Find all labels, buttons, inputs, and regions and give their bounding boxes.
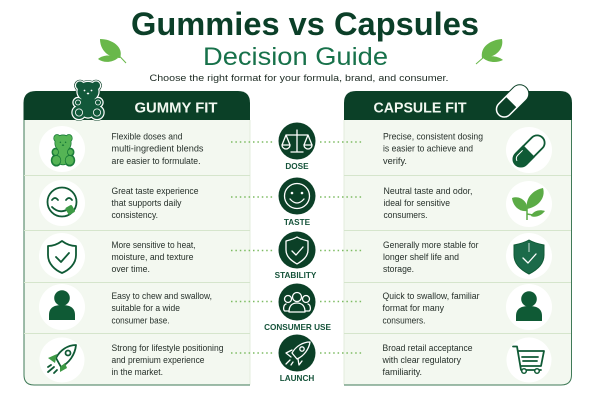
text: capsule row 3: storage. (383, 264, 414, 274)
panel border (344, 110, 572, 385)
panel body (24, 110, 250, 385)
text: capsule row 3 (383, 240, 478, 274)
title: Gummies vs Capsules (131, 6, 479, 42)
text: gummy row 1: Flexible doses and (112, 132, 182, 142)
panel inner edge (249, 120, 251, 384)
icon: shopping cart (506, 338, 552, 382)
tagline: Choose the right format for your formula, brand, and consumer. (150, 73, 449, 84)
panel: gummy fit (24, 82, 250, 385)
text: capsule row 2: Neutral taste and odor, (384, 186, 472, 196)
connector dots (231, 142, 364, 353)
criterion: consumer use: CONSUMER USE (264, 323, 331, 332)
text: capsule row 1: verify. (383, 156, 407, 166)
subtitle: Decision Guide (203, 43, 388, 71)
text: gummy row 4: consumer base. (112, 316, 170, 326)
panel body (344, 110, 572, 385)
icon: header bear (72, 82, 104, 119)
text: capsule row 1: is easier to achieve and (383, 144, 473, 154)
icon: person (39, 284, 85, 330)
text: gummy row 1 (112, 132, 204, 166)
text: capsule row 5 (382, 343, 472, 377)
text: capsule row 2: consumers. (384, 210, 428, 220)
text: capsule row 5: with clear regulatory (382, 355, 461, 365)
panel: capsule fit (344, 81, 572, 385)
text: gummy row 1: multi-ingredient blends (112, 144, 204, 154)
text: capsule row 4: Quick to swallow, familiar (382, 291, 480, 301)
criterion: stability (275, 232, 317, 280)
text: capsule row 5: Broad retail acceptance (382, 343, 472, 353)
text: gummy row 3: moisture, and texture (112, 252, 194, 262)
text: capsule row 5: familiarity. (382, 367, 422, 377)
criterion: dose: DOSE (285, 162, 309, 171)
row dividers (344, 176, 571, 334)
icon: right leaves (476, 39, 503, 64)
text: gummy row 2: consistency. (112, 210, 158, 220)
text: gummy row 5: in the market. (112, 367, 163, 377)
text: gummy row 1: are easier to formulate. (112, 156, 200, 166)
criterion: launch: LAUNCH (280, 374, 314, 383)
text: capsule row 4 (382, 291, 480, 326)
header label: CAPSULE FIT (374, 100, 467, 116)
header label: GUMMY FIT (134, 100, 218, 116)
criterion: consumer use (264, 284, 331, 332)
text: capsule row 2 (384, 186, 472, 220)
header bar (344, 91, 572, 120)
icon: header capsule (491, 81, 533, 122)
text: gummy row 3: More sensitive to heat, (112, 240, 196, 250)
icon: person (506, 284, 552, 330)
criterion: stability: STABILITY (275, 271, 317, 280)
panel inner edge (343, 120, 345, 384)
panel border (24, 110, 250, 385)
text: capsule row 3: longer shelf life and (383, 252, 459, 262)
text: capsule row 2: ideal for sensitive (384, 198, 450, 208)
text: gummy row 3: over time. (112, 264, 150, 274)
criterion: launch (278, 334, 316, 383)
text: capsule row 1 (383, 132, 483, 166)
text: gummy row 5: Strong for lifestyle positioning (112, 343, 224, 353)
icon: gummy bear (39, 126, 85, 172)
icon: filled shield (506, 233, 552, 279)
text: gummy row 2: that supports daily (112, 198, 182, 208)
criterion: taste (278, 178, 316, 227)
text: capsule row 4: consumers. (382, 316, 426, 326)
text: gummy row 4 (112, 291, 212, 326)
text: gummy row 2 (112, 186, 198, 220)
criterion: dose (278, 122, 316, 171)
icon: smiling face (39, 180, 85, 226)
icon: capsule (506, 127, 552, 173)
text: gummy row 5 (112, 343, 224, 377)
text: gummy row 2: Great taste experience (112, 186, 198, 196)
icon: shield check (39, 233, 85, 279)
criterion: taste: TASTE (284, 218, 311, 227)
text: capsule row 4: format for many (382, 303, 444, 313)
text: gummy row 3 (112, 240, 196, 274)
text: gummy row 5: and premium experience (112, 355, 204, 365)
icon: plant leaves (506, 181, 552, 227)
text: gummy row 4: Easy to chew and swallow, (112, 291, 212, 301)
text: capsule row 1: Precise, consistent dosing (383, 132, 483, 142)
text: gummy row 4: suitable for a wide (112, 303, 180, 313)
header bar (24, 91, 250, 120)
row dividers (24, 176, 250, 334)
text: capsule row 3: Generally more stable for (383, 240, 478, 250)
icon: rocket (40, 338, 84, 382)
icon: left leaves (98, 39, 126, 63)
